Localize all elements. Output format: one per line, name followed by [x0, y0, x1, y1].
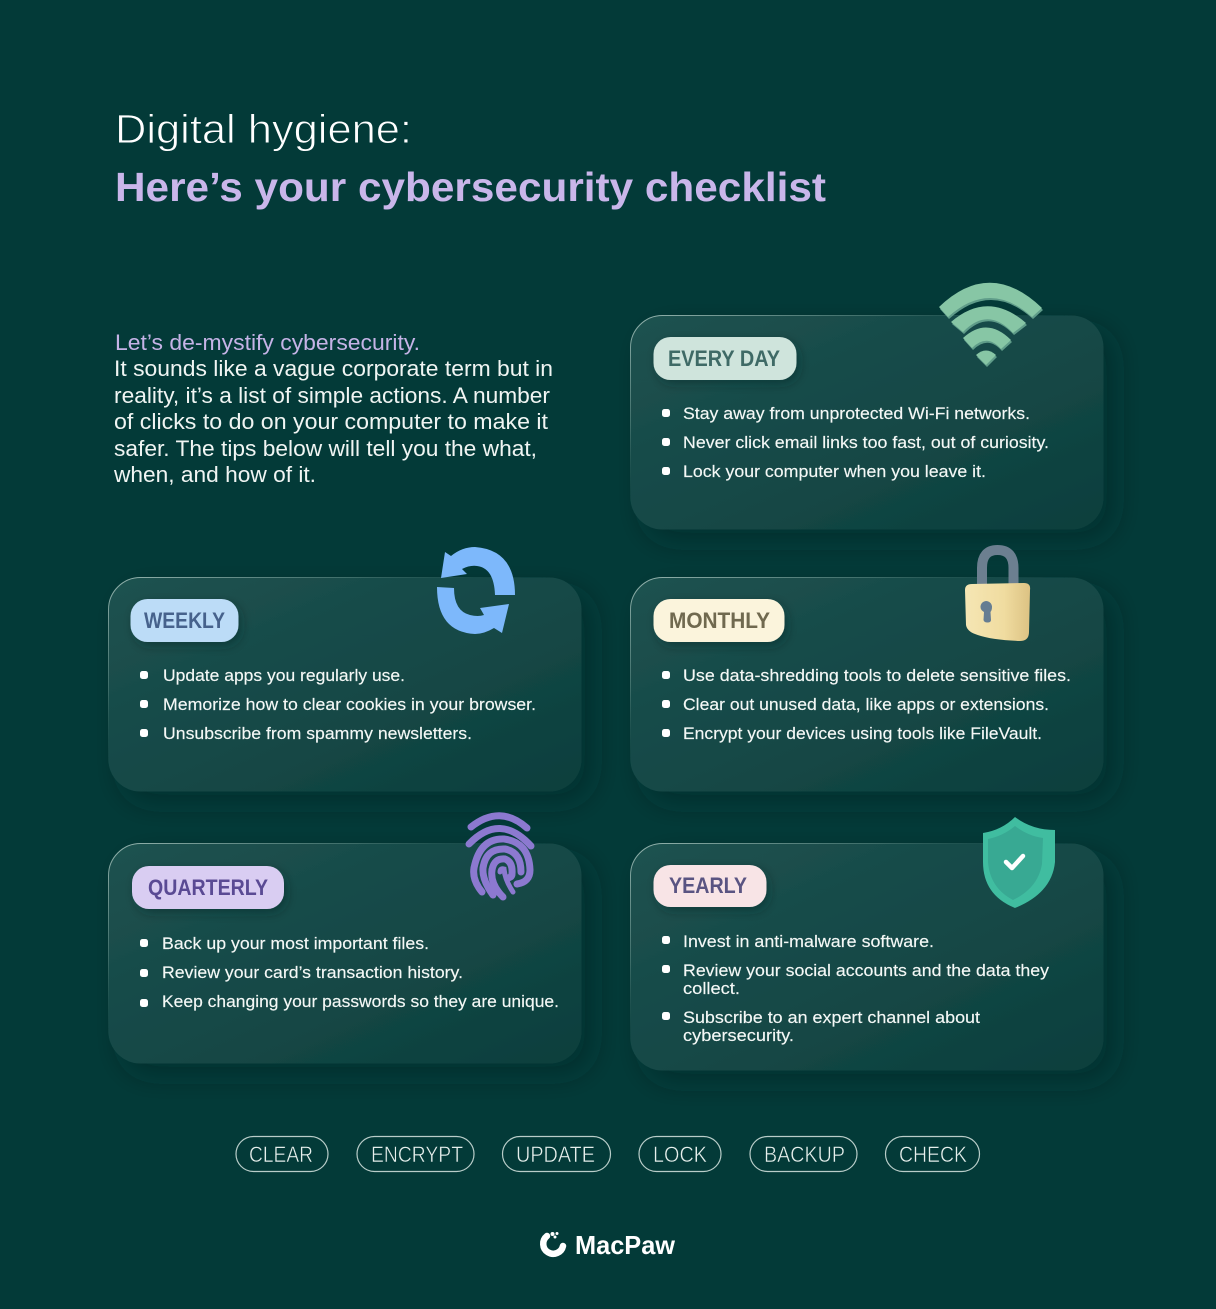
checklist: yearly: cybersecurity.: [683, 1026, 794, 1045]
icon: wifi: [939, 283, 1043, 367]
label pill: quarterly: QUARTERLY: [148, 875, 268, 900]
intro text: It sounds like a vague corporate term but in: [114, 356, 553, 381]
checklist: yearly: Invest in anti-malware software.: [683, 932, 934, 951]
checklist: every day: Never click email links too fast, out of curiosity.: [683, 433, 1049, 452]
intro text: safer. The tips below will tell you the what,: [114, 436, 537, 461]
action tags: CLEAR: [249, 1142, 313, 1167]
action tags: LOCK: [653, 1142, 707, 1167]
label pill: yearly: YEARLY: [669, 873, 747, 898]
panel: monthly: [630, 550, 1104, 792]
action tags: UPDATE: [516, 1142, 595, 1167]
checklist: monthly: [662, 666, 1071, 743]
label pill: yearly: [654, 865, 766, 907]
action tags: [236, 1136, 980, 1172]
icon: refresh arrows: [437, 547, 515, 634]
checklist: quarterly: [140, 934, 559, 1011]
checklist: quarterly: Keep changing your passwords so they are unique.: [162, 992, 559, 1011]
checklist: weekly: Memorize how to clear cookies in your browser.: [163, 695, 536, 714]
label pill: every day: EVERY DAY: [668, 346, 780, 371]
checklist: quarterly: Review your card’s transaction history.: [162, 963, 463, 982]
icon: fingerprint: [469, 816, 531, 897]
action tags: CHECK: [899, 1142, 967, 1167]
label pill: quarterly: [132, 866, 284, 909]
intro text: of clicks to do on your computer to make it: [114, 409, 548, 434]
checklist: weekly: Update apps you regularly use.: [163, 666, 405, 685]
icon: padlock: [965, 550, 1030, 641]
logo: MacPaw: MacPaw: [575, 1230, 676, 1260]
panel: yearly: [630, 817, 1104, 1070]
checklist: yearly: [662, 932, 1050, 1045]
label pill: monthly: [654, 599, 784, 642]
panel: quarterly: [108, 816, 582, 1064]
checklist: yearly: Review your social accounts and the data they: [683, 961, 1050, 980]
intro text: [113, 330, 553, 487]
icon: shield: [983, 817, 1055, 908]
checklist: monthly: Use data-shredding tools to delete sensitive files.: [683, 666, 1071, 685]
action tags: ENCRYPT: [371, 1142, 463, 1167]
checklist: every day: Stay away from unprotected Wi-Fi networks.: [683, 404, 1030, 423]
intro text: when, and how of it.: [113, 462, 316, 487]
title: Digital hygiene:: [115, 106, 412, 152]
action tags: BACKUP: [764, 1142, 845, 1167]
checklist: weekly: Unsubscribe from spammy newsletters.: [163, 724, 472, 743]
label pill: weekly: WEEKLY: [144, 608, 225, 633]
panel: weekly: [108, 547, 582, 792]
title: Here’s your cybersecurity checklist: [115, 164, 826, 210]
intro text: reality, it’s a list of simple actions. A number: [114, 383, 550, 408]
checklist: weekly: [140, 666, 536, 743]
label pill: weekly: [130, 599, 238, 642]
checklist: monthly: Encrypt your devices using tools like FileVault.: [683, 724, 1042, 743]
checklist: yearly: Subscribe to an expert channel about: [683, 1008, 980, 1027]
checklist: monthly: Clear out unused data, like apps or extensions.: [683, 695, 1049, 714]
panel: every day: [630, 283, 1104, 530]
intro text: Let’s de-mystify cybersecurity.: [115, 330, 420, 355]
checklist: yearly: collect.: [683, 979, 740, 998]
label pill: every day: [654, 337, 796, 380]
checklist: every day: [662, 404, 1049, 481]
label pill: monthly: MONTHLY: [669, 608, 770, 633]
checklist: quarterly: Back up your most important files.: [162, 934, 429, 953]
checklist: every day: Lock your computer when you leave it.: [683, 462, 986, 481]
title: [115, 106, 826, 210]
